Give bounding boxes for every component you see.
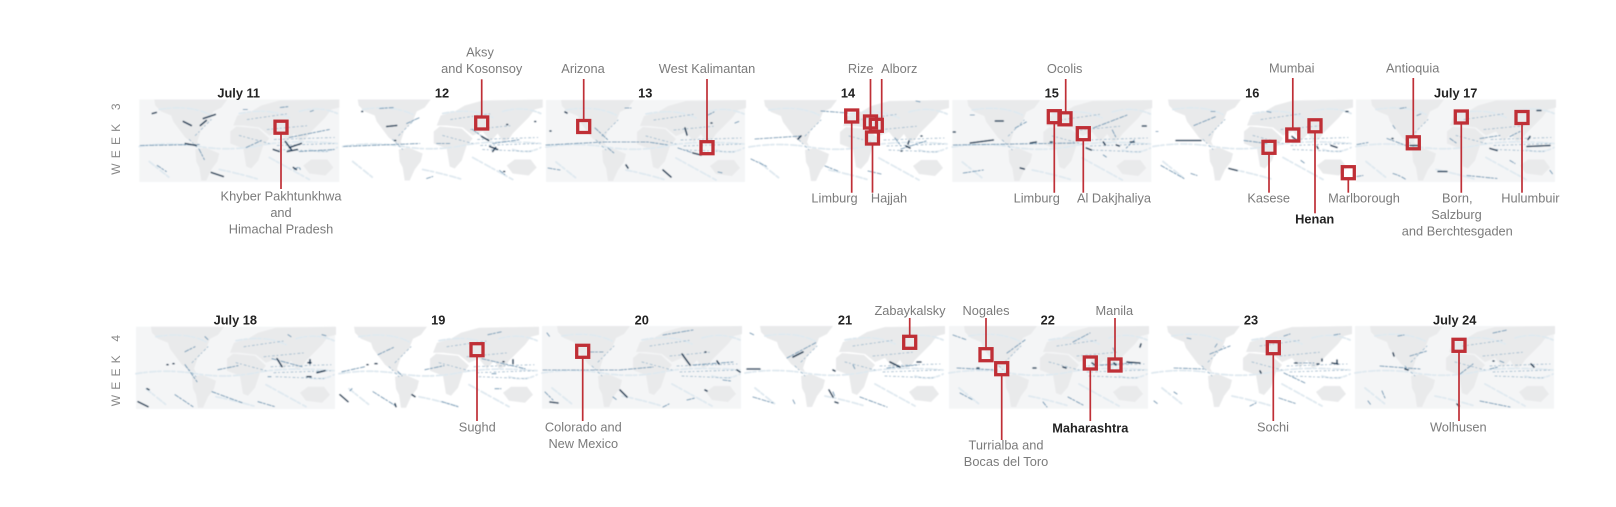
marker: Hulumbuir: Hulumbuir xyxy=(1501,191,1560,206)
marker: Wolhusen: Wolhusen xyxy=(1430,420,1487,435)
map: July 14 xyxy=(749,100,949,182)
heading: 23: 23 xyxy=(1244,312,1258,327)
map: July 16 xyxy=(1153,100,1356,182)
marker: Khyber Pakhtunkhwa and Himachal Pradesh: Himachal Pradesh xyxy=(229,222,333,237)
map: July 21 xyxy=(745,326,945,409)
marker: Ocolis xyxy=(1047,61,1082,125)
marker: Al Dakjhaliya xyxy=(1077,128,1152,206)
marker: Turrialba and Bocas del Toro: Turrialba and xyxy=(969,438,1043,453)
map: July 24 xyxy=(1355,326,1555,409)
marker: Zabaykalsky xyxy=(874,303,946,348)
map: July 18 xyxy=(136,327,336,409)
marker: Limburg, July 15 xyxy=(1014,111,1060,206)
marker: Khyber Pakhtunkhwa and Himachal Pradesh xyxy=(221,121,342,237)
marker: Antioquia xyxy=(1386,61,1440,149)
marker: Manila: Manila xyxy=(1095,303,1134,318)
marker: Born, Salzburg and Berchtesgaden xyxy=(1402,111,1513,239)
marker: Colorado and New Mexico: Colorado and xyxy=(545,419,622,434)
marker: Henan xyxy=(1295,120,1334,226)
map: July 12 xyxy=(343,100,543,182)
marker: Turrialba and Bocas del Toro: Bocas del Toro xyxy=(964,454,1048,469)
marker: Hajjah: Hajjah xyxy=(871,191,907,206)
heading: 12: 12 xyxy=(435,86,449,101)
marker: Aksy and Kosonsoy: and Kosonsoy xyxy=(441,61,523,76)
marker: Hulumbuir xyxy=(1501,112,1560,206)
marker: Arizona: Arizona xyxy=(561,61,606,76)
heading: 13: 13 xyxy=(638,86,652,101)
marker: Sughd: Sughd xyxy=(459,420,496,435)
marker: Arizona xyxy=(561,61,606,132)
marker: Nogales: Nogales xyxy=(963,303,1009,318)
marker: Born, Salzburg and Berchtesgaden: and Berchtesgaden xyxy=(1402,224,1513,239)
heading: 21: 21 xyxy=(838,312,852,327)
marker: Turrialba and Bocas del Toro xyxy=(964,363,1048,469)
marker: Maharashtra: Maharashtra xyxy=(1052,420,1129,435)
map: July 22 xyxy=(949,326,1149,409)
marker: Colorado and New Mexico xyxy=(545,345,622,451)
week 4 label: WEEK 4 xyxy=(109,330,123,406)
marker: Manila xyxy=(1095,303,1134,371)
heading: 14: 14 xyxy=(841,86,856,101)
marker: Marlborough: Marlborough xyxy=(1328,191,1400,206)
marker: Alborz: Alborz xyxy=(881,61,917,76)
map: July 13 xyxy=(546,100,746,182)
marker: Kasese xyxy=(1247,141,1290,206)
marker: Wolhusen xyxy=(1430,339,1487,435)
marker: Nogales xyxy=(963,303,1009,361)
marker: Marlborough xyxy=(1328,167,1400,206)
map: July 20 xyxy=(542,326,742,409)
marker: Mumbai xyxy=(1269,61,1314,141)
heading: 15: 15 xyxy=(1045,86,1059,101)
marker: West Kalimantan: West Kalimantan xyxy=(659,61,755,76)
marker: Alborz xyxy=(870,61,917,131)
marker: Zabaykalsky: Zabaykalsky xyxy=(874,303,946,318)
map: July 19 xyxy=(339,327,539,409)
marker: Ocolis: Ocolis xyxy=(1047,61,1082,76)
marker: Born, Salzburg and Berchtesgaden: Salzburg xyxy=(1431,207,1482,222)
heading: 19: 19 xyxy=(431,312,445,327)
heading: July 17: July 17 xyxy=(1434,86,1477,101)
map: July 15 xyxy=(952,100,1152,182)
marker: Antioquia: Antioquia xyxy=(1386,61,1440,76)
marker: Limburg, July 14 xyxy=(811,110,858,206)
marker: Aksy and Kosonsoy xyxy=(441,45,523,129)
marker: Sochi xyxy=(1257,342,1289,435)
marker: Aksy and Kosonsoy: Aksy xyxy=(466,45,494,60)
heading: July 11: July 11 xyxy=(217,86,260,101)
heading: July 24: July 24 xyxy=(1433,312,1477,327)
marker: Maharashtra xyxy=(1052,357,1129,435)
marker: West Kalimantan xyxy=(659,61,755,154)
marker: Rize xyxy=(848,61,876,128)
heading: 16: 16 xyxy=(1245,86,1259,101)
heading: 22: 22 xyxy=(1041,312,1055,327)
marker: Khyber Pakhtunkhwa and Himachal Pradesh: and xyxy=(270,205,292,220)
marker: Colorado and New Mexico: New Mexico xyxy=(548,436,618,451)
marker: Born, Salzburg and Berchtesgaden: Born, xyxy=(1442,191,1473,206)
marker: Hajjah xyxy=(866,132,907,206)
marker: Limburg, July 15: Limburg xyxy=(1014,191,1060,206)
marker: Mumbai: Mumbai xyxy=(1269,61,1314,76)
marker: Sughd xyxy=(459,344,496,435)
marker: Sochi: Sochi xyxy=(1257,420,1289,435)
map: July 23 xyxy=(1152,326,1352,409)
marker: Limburg, July 14: Limburg xyxy=(811,191,858,206)
map: July 17 xyxy=(1356,100,1556,182)
heading: July 18: July 18 xyxy=(214,312,257,327)
heading: 20: 20 xyxy=(635,312,649,327)
week 3 label: WEEK 3 xyxy=(109,98,123,175)
marker: Khyber Pakhtunkhwa and Himachal Pradesh: Khyber Pakhtunkhwa xyxy=(221,189,342,204)
marker: Kasese: Kasese xyxy=(1247,191,1290,206)
marker: Rize: Rize xyxy=(848,61,874,76)
map: July 11 xyxy=(139,100,339,182)
marker: Henan: Henan xyxy=(1295,211,1334,226)
marker: Al Dakjhaliya: Al Dakjhaliya xyxy=(1077,191,1152,206)
